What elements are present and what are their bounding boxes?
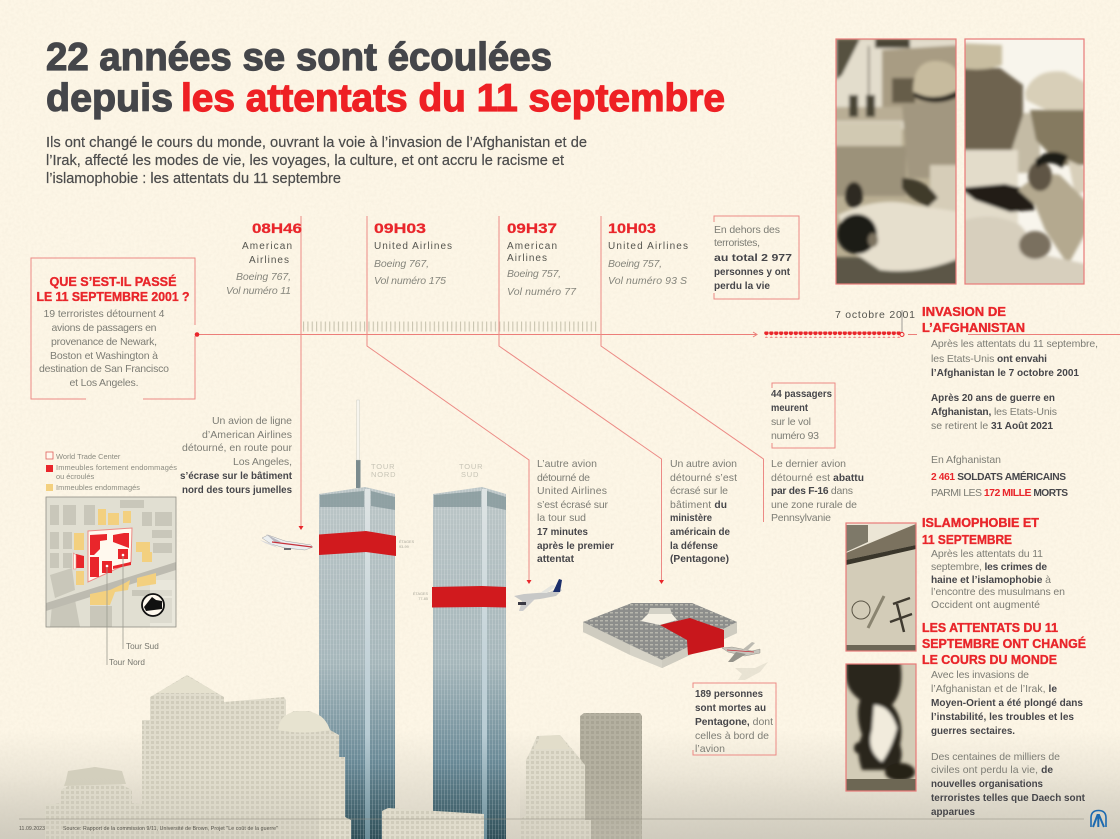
text: pentagon crash: détourné s’est bbox=[670, 472, 737, 484]
section: invasion of afghanistan: se retirent le 31 Août 2021 bbox=[931, 420, 1053, 432]
leader line flight 93 bbox=[601, 216, 764, 522]
north arrow bbox=[142, 594, 164, 616]
text: second crash bbox=[537, 458, 614, 565]
panel: what happened: provenance de Newark, bbox=[51, 336, 157, 348]
flight 08H46 bbox=[226, 220, 302, 297]
text: pentagon crash: ministère bbox=[670, 513, 712, 524]
section: islamophobia: haine et l’islamophobie à bbox=[931, 574, 1051, 586]
text: first crash: nord des tours jumelles bbox=[182, 485, 292, 496]
flight 10H03 bbox=[608, 220, 688, 287]
flight 09H37: 09H37 bbox=[507, 220, 557, 236]
text: second crash: United Airlines bbox=[537, 485, 607, 497]
skyline buildings bbox=[45, 675, 642, 839]
tour sud callout: Tour Sud bbox=[126, 642, 159, 651]
heading: SEPTEMBRE ONT CHANGÉ bbox=[922, 636, 1086, 651]
panel heading bbox=[36, 274, 190, 304]
tour sud callout bbox=[123, 556, 159, 651]
panel: what happened bbox=[31, 258, 195, 399]
floors label bbox=[413, 591, 428, 601]
section: islamophobia: septembre, les crimes de bbox=[931, 561, 1047, 573]
south tower bbox=[413, 462, 506, 839]
flight 09H03: United Airlines bbox=[374, 241, 452, 252]
flight 08H46: American bbox=[242, 241, 292, 252]
text: pentagon crash: (Pentagone) bbox=[670, 554, 729, 565]
damaged section bbox=[660, 618, 724, 655]
footer bbox=[19, 819, 1084, 832]
text: second crash: L’autre avion bbox=[537, 458, 597, 470]
title: 22 années se sont écoulées bbox=[46, 36, 552, 79]
section: attacks changed the world: civiles ont perdu la vie, de bbox=[931, 764, 1053, 776]
callout: 2977 victims: personnes y ont bbox=[714, 267, 791, 278]
tower name: NORD bbox=[371, 470, 396, 479]
section: invasion of afghanistan: En Afghanistan bbox=[931, 454, 1001, 466]
flight 09H03: 09H03 bbox=[374, 220, 426, 236]
flight 10H03: Vol numéro 93 S bbox=[608, 275, 687, 287]
section: invasion of afghanistan: les Etats-Unis ont envahi bbox=[931, 353, 1047, 365]
section: attacks changed the world: Avec les invasions de bbox=[931, 669, 1029, 681]
north tower bbox=[319, 400, 415, 839]
impact band north tower bbox=[319, 531, 396, 556]
photo: smoke column bbox=[846, 660, 916, 791]
panel: what happened: destination de San Francisco bbox=[39, 363, 169, 375]
text: second crash: s’est écrasé sur bbox=[537, 499, 608, 511]
flight 09H03: Boeing 767, bbox=[374, 258, 429, 270]
text: second crash: 17 minutes bbox=[537, 527, 588, 538]
section: attacks changed the world: Moyen-Orient a été plongé dans bbox=[931, 698, 1083, 709]
callout: 2977 victims: En dehors des bbox=[714, 224, 780, 236]
panel heading: QUE S’EST-IL PASSÉ bbox=[50, 274, 176, 289]
timeline axis bbox=[195, 310, 1120, 338]
text: flight 93: Pennsylvanie bbox=[771, 512, 831, 524]
tower name: TOUR bbox=[371, 462, 395, 471]
heading: L’AFGHANISTAN bbox=[922, 321, 1025, 335]
text: first crash: Los Angeles, bbox=[233, 456, 292, 468]
antenna bbox=[356, 400, 360, 488]
callout: flight 93 victims: meurent bbox=[771, 403, 809, 414]
heading bbox=[922, 305, 1025, 335]
callout: pentagon deaths bbox=[693, 683, 776, 755]
leader line flight 175 bbox=[367, 216, 532, 584]
flight 10H03: United Airlines bbox=[608, 241, 688, 252]
panel: what happened: et Los Angeles. bbox=[70, 377, 138, 389]
section: attacks changed the world: terroristes telles que Daech sont bbox=[931, 793, 1086, 804]
callout: 2977 victims: au total 2 977 bbox=[714, 253, 792, 264]
tower name: TOUR bbox=[459, 462, 483, 471]
heading bbox=[922, 621, 1086, 667]
callout: pentagon deaths: Pentagone, dont bbox=[695, 716, 773, 728]
flight 09H37: American bbox=[507, 241, 557, 252]
section: islamophobia: Après les attentats du 11 bbox=[931, 548, 1043, 560]
section: attacks changed the world: l’Afghanistan et de l’Irak, le bbox=[931, 683, 1057, 695]
text: second crash: attentat bbox=[537, 554, 575, 565]
callout: flight 93 victims bbox=[771, 383, 835, 448]
text: first crash bbox=[180, 415, 293, 496]
impact band south tower bbox=[432, 586, 506, 608]
text: flight 93 bbox=[771, 458, 864, 524]
tour nord callout: Tour Nord bbox=[109, 658, 145, 667]
heading: ISLAMOPHOBIE ET bbox=[922, 516, 1039, 530]
text: first crash: s’écrase sur le bâtiment bbox=[180, 471, 293, 482]
heading bbox=[922, 516, 1039, 547]
leader line flight 11 bbox=[298, 216, 304, 530]
callout: pentagon deaths: celles à bord de bbox=[695, 730, 769, 742]
section: attacks changed the world: nouvelles organisations bbox=[931, 779, 1043, 790]
panel: what happened: Boston et Washington à bbox=[50, 350, 158, 362]
panel heading: LE 11 SEPTEMBRE 2001 ? bbox=[36, 290, 190, 304]
legend: World Trade Center bbox=[56, 452, 121, 461]
section: islamophobia: Occident ont augmenté bbox=[931, 599, 1040, 611]
subtitle: l’islamophobie : les attentats du 11 septembre bbox=[46, 171, 341, 187]
title: les attentats du 11 septembre bbox=[181, 77, 725, 120]
logo: AA bbox=[1091, 810, 1106, 827]
heading: 11 SEPTEMBRE bbox=[922, 533, 1012, 547]
plane: american airlines 767 bbox=[260, 534, 313, 550]
text: second crash: la tour sud bbox=[537, 512, 586, 524]
subtitle: l’Irak, affecté les modes de vie, les voyages, la culture, et ont accru le racisme et bbox=[46, 153, 564, 169]
legend: Immeubles fortement endommagés bbox=[56, 463, 177, 472]
title: depuis bbox=[46, 77, 173, 120]
text: first crash: d’American Airlines bbox=[202, 429, 292, 441]
section: islamophobia bbox=[922, 516, 1065, 611]
section: invasion of afghanistan: Après 20 ans de guerre en bbox=[931, 393, 1055, 404]
floors label: 93-99 bbox=[399, 545, 409, 549]
callout: pentagon deaths: 189 personnes bbox=[695, 689, 763, 700]
text: pentagon crash: écrasé sur le bbox=[670, 485, 728, 497]
WTC site bbox=[88, 528, 132, 582]
flight 09H37: Airlines bbox=[507, 253, 547, 264]
text: first crash: détourné, en route pour bbox=[182, 442, 292, 454]
flight 09H37: Boeing 757, bbox=[507, 268, 561, 280]
text: pentagon crash: américain de bbox=[670, 527, 730, 538]
photo: graffiti on wall bbox=[846, 523, 916, 651]
flight 09H37 bbox=[507, 220, 577, 298]
subtitle: Ils ont changé le cours du monde, ouvrant la voie à l’invasion de l’Afghanistan et de bbox=[46, 135, 587, 151]
text: second crash: après le premier bbox=[537, 541, 614, 552]
section: attacks changed the world: guerres sectaires. bbox=[931, 726, 1015, 737]
leader line flight 77 bbox=[499, 216, 664, 584]
callout: flight 93 victims: numéro 93 bbox=[771, 430, 819, 442]
legend bbox=[46, 452, 177, 492]
floors label bbox=[399, 539, 415, 549]
section: attacks changed the world: apparues bbox=[931, 807, 975, 818]
text: flight 93: Le dernier avion bbox=[771, 458, 846, 470]
callout: 2977 victims: perdu la vie bbox=[714, 281, 770, 292]
section: invasion of afghanistan: PARMI LES 172 MILLE MORTS bbox=[931, 487, 1068, 499]
callout: pentagon deaths: l’avion bbox=[695, 743, 725, 755]
section: attacks changed the world: l’instabilité, les troubles et les bbox=[931, 712, 1074, 723]
photo: soldiers and man in keffiyeh bbox=[960, 39, 1090, 290]
flight 09H03: Vol numéro 175 bbox=[374, 275, 446, 287]
tower name bbox=[459, 462, 483, 479]
callout: pentagon deaths: sont mortes au bbox=[695, 703, 766, 714]
tower name bbox=[371, 462, 396, 479]
panel: what happened: avions de passagers en bbox=[52, 322, 157, 334]
text: flight 93: détourné est abattu bbox=[771, 472, 864, 484]
section: invasion of afghanistan: 2 461 SOLDATS AMÉRICAINS bbox=[931, 470, 1066, 483]
date 7 octobre 2001: 7 octobre 2001 bbox=[835, 309, 915, 321]
flight 08H46: 08H46 bbox=[252, 220, 302, 236]
flight 08H46: Airlines bbox=[249, 255, 289, 266]
heading: LES ATTENTATS DU 11 bbox=[922, 621, 1058, 635]
section: invasion of afghanistan: Après les attentats du 11 septembre, bbox=[931, 338, 1098, 350]
tour nord callout bbox=[107, 567, 145, 667]
tower name: SUD bbox=[461, 470, 479, 479]
section: invasion of afghanistan: l’Afghanistan le 7 octobre 2001 bbox=[931, 368, 1079, 379]
flight 10H03: Boeing 757, bbox=[608, 258, 662, 270]
text: flight 93: par des F-16 dans bbox=[771, 485, 853, 497]
callout: 2977 victims: terroristes, bbox=[714, 237, 760, 249]
photo: soldier and detainee bbox=[830, 39, 960, 287]
legend: ou écroulés bbox=[56, 472, 95, 481]
callout: flight 93 victims: 44 passagers bbox=[771, 389, 832, 400]
floors label: 77-85 bbox=[418, 597, 428, 601]
flight 10H03: 10H03 bbox=[608, 220, 656, 236]
flight 08H46: Vol numéro 11 bbox=[226, 285, 291, 297]
subtitle bbox=[46, 135, 587, 187]
flight 09H37: Vol numéro 77 bbox=[507, 286, 577, 298]
flight 08H46: Boeing 767, bbox=[236, 271, 291, 283]
section: invasion of afghanistan: Afghanistan, les Etats-Unis bbox=[931, 406, 1057, 418]
callout: flight 93 victims: sur le vol bbox=[771, 416, 811, 428]
heading: LE COURS DU MONDE bbox=[922, 653, 1057, 667]
floors label: ÉTAGES bbox=[413, 591, 428, 596]
text: second crash: détourné de bbox=[537, 472, 590, 484]
section: invasion of afghanistan bbox=[922, 305, 1098, 499]
text: pentagon crash: bâtiment du bbox=[670, 499, 727, 511]
callout: 2977 victims bbox=[714, 216, 799, 299]
map of world trade center bbox=[46, 497, 176, 627]
floors label: ÉTAGES bbox=[399, 539, 415, 544]
plane: united 767 bbox=[514, 579, 562, 611]
text: pentagon crash bbox=[670, 458, 737, 565]
panel: what happened: 19 terroristes détournent 4 bbox=[44, 308, 165, 320]
title bbox=[46, 36, 725, 120]
plane: pentagon bbox=[722, 642, 768, 680]
heading: INVASION DE bbox=[922, 305, 1006, 319]
text: pentagon crash: Un autre avion bbox=[670, 458, 737, 470]
section: attacks changed the world: Des centaines de milliers de bbox=[931, 751, 1060, 763]
section: islamophobia: l’encontre des musulmans en bbox=[931, 586, 1065, 598]
pentagon bbox=[583, 603, 737, 668]
footer: Source: Rapport de la commission 9/11, Université de Brown, Projet "Le coût de la guerre" bbox=[63, 826, 278, 832]
section: attacks changed the world bbox=[922, 621, 1086, 818]
text: flight 93: une zone rurale de bbox=[771, 499, 857, 511]
footer: 11.09.2023 bbox=[19, 826, 45, 832]
text: first crash: Un avion de ligne bbox=[212, 415, 292, 427]
legend: Immeubles endommagés bbox=[56, 483, 140, 492]
flight 09H03 bbox=[374, 220, 452, 287]
text: pentagon crash: la défense bbox=[670, 541, 718, 552]
